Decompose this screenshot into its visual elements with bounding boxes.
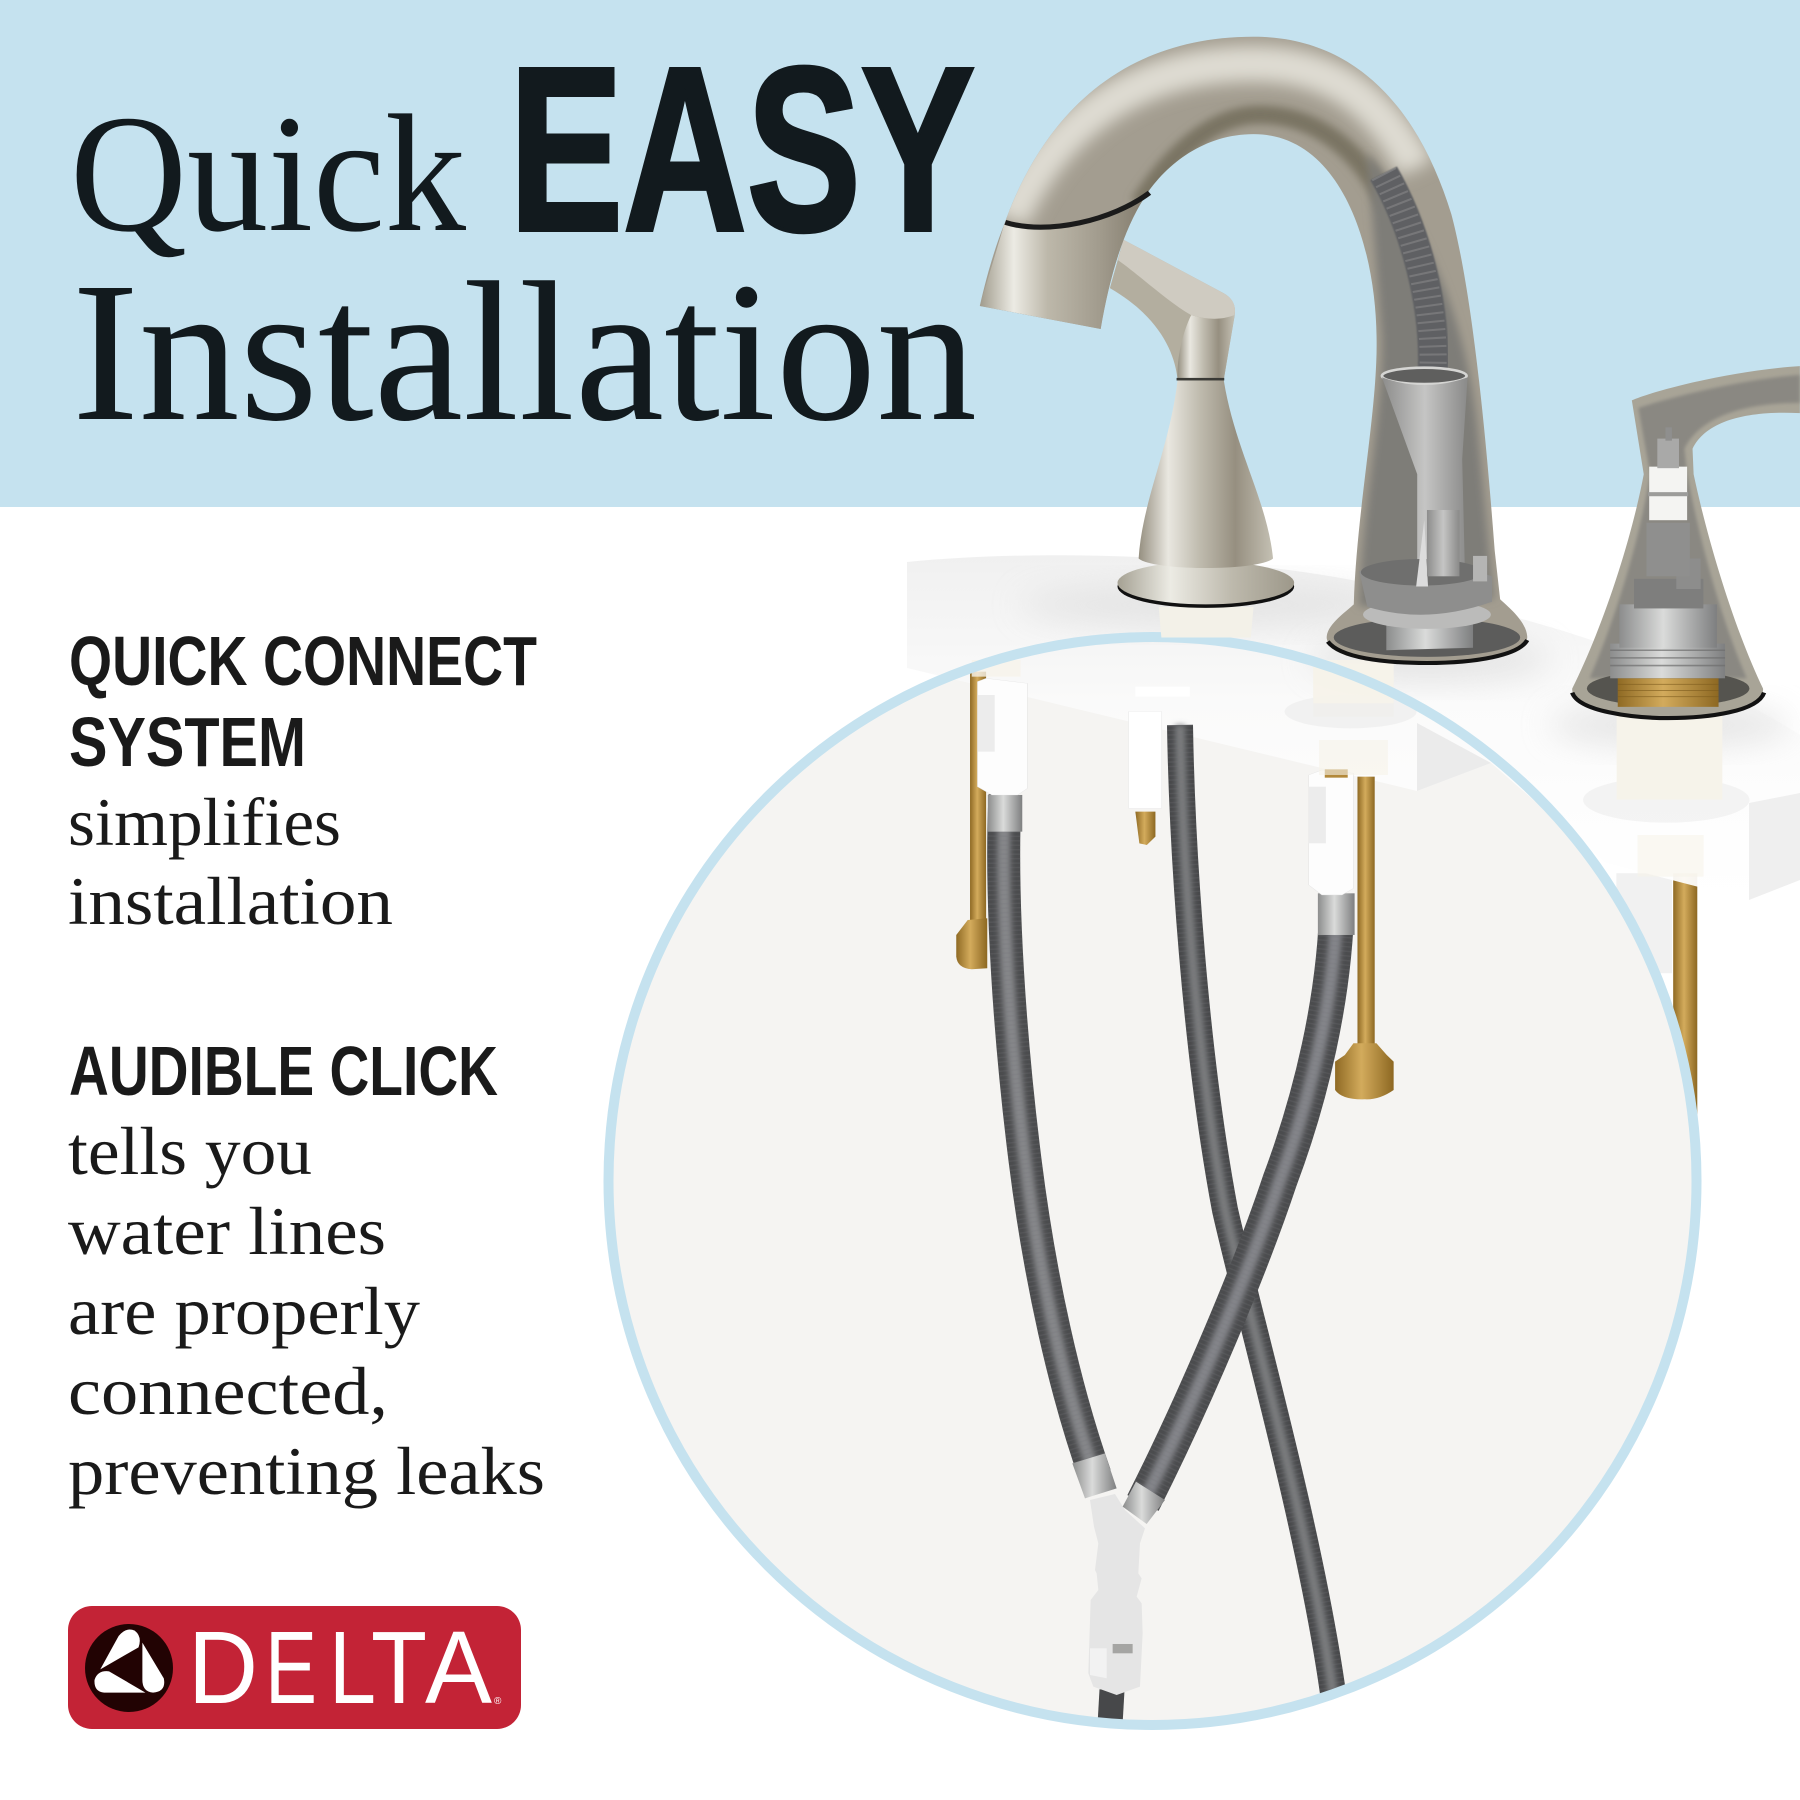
centre stem <box>1128 712 1162 845</box>
circle inset background <box>608 637 1696 1725</box>
logo: Delta <box>68 1606 521 1729</box>
left handle <box>1110 240 1294 637</box>
internal hose <box>1384 173 1433 380</box>
logo: Delta: T <box>371 1610 427 1725</box>
brass threaded cartridge base <box>1618 672 1719 707</box>
Y connector <box>1072 1453 1165 1695</box>
text block: audible click <box>68 1032 545 1509</box>
under-counter plumbing clipped to circle <box>956 672 1394 1725</box>
text block: audible click: connected, <box>68 1353 388 1429</box>
logo: Delta: A <box>425 1610 492 1725</box>
right handle cutaway <box>1572 366 1800 800</box>
brass rod and nut: left <box>956 672 987 969</box>
internal cone <box>1382 368 1467 384</box>
far-right brass rod behind the circle <box>1616 873 1697 1140</box>
text block: quick connect system: QUICK CONNECT <box>69 622 537 700</box>
logo: Delta: D <box>188 1610 258 1725</box>
text block: quick connect system: SYSTEM <box>69 703 306 781</box>
hose: right <box>1143 900 1337 1503</box>
title: EASY <box>509 18 975 280</box>
text block: quick connect system <box>68 622 537 939</box>
text block: audible click: are properly <box>68 1273 420 1349</box>
right quick connector and ferrule <box>1309 769 1355 935</box>
left quick connector and ferrule <box>977 678 1027 832</box>
logo: Delta: L <box>329 1610 376 1725</box>
logo: Delta: E <box>265 1610 317 1725</box>
text block: audible click: AUDIBLE CLICK <box>69 1032 498 1110</box>
faucet assembly <box>980 37 1800 800</box>
text block: audible click: tells you <box>68 1113 312 1189</box>
text block: audible click: water lines <box>68 1193 386 1269</box>
brass rod and nut: right <box>1335 777 1394 1099</box>
spout <box>980 37 1527 663</box>
hose: bottom outlet <box>1110 1690 1112 1725</box>
hose: centre <box>1180 725 1333 1693</box>
text block: audible click: preventing leaks <box>68 1433 545 1509</box>
text block: quick connect system: simplifies <box>68 784 341 860</box>
circle outline <box>608 637 1696 1725</box>
text block: quick connect system: installation <box>68 863 393 939</box>
mounting shanks and washers <box>972 660 1750 877</box>
counter top slab <box>907 555 1800 900</box>
background: blue header band <box>0 0 1800 507</box>
title: Quick <box>70 81 466 267</box>
title: Installation <box>72 242 977 463</box>
logo: Delta: ® <box>494 1696 502 1707</box>
title <box>70 18 977 463</box>
hose: left <box>1004 795 1095 1475</box>
internal base <box>1334 618 1520 657</box>
